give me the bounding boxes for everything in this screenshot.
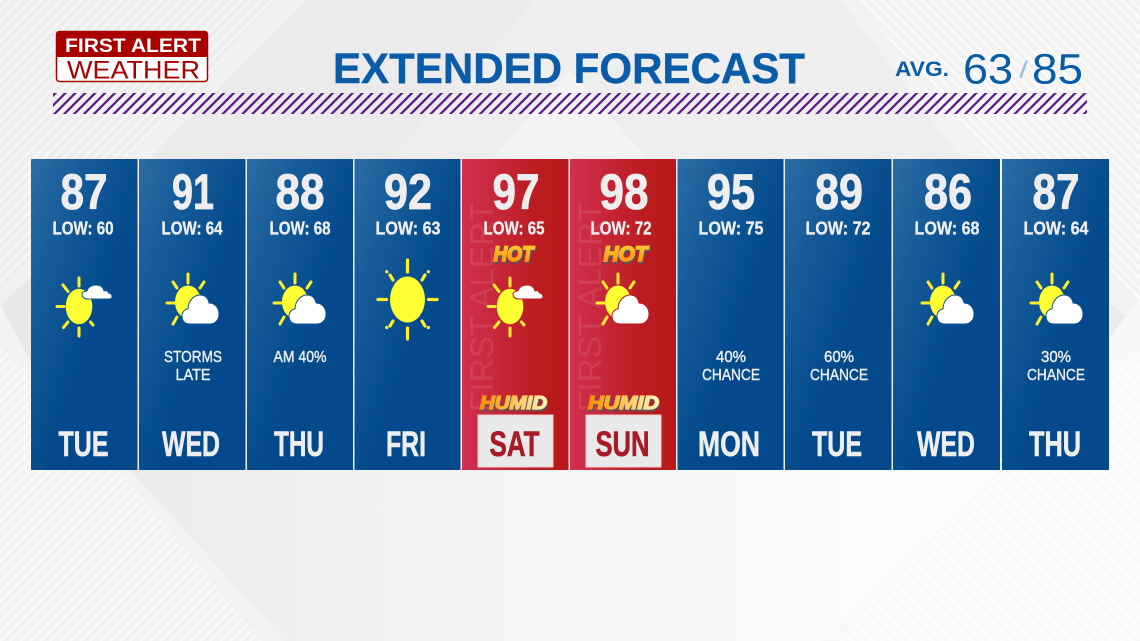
panel: next Thursday: CHANCE: [1027, 367, 1085, 384]
panel: Tuesday: 87: [60, 164, 108, 220]
panel: Monday: 40%: [716, 349, 746, 366]
icon: mostly sunny: [57, 278, 112, 336]
panel: Saturday (alert): [462, 159, 568, 470]
panel: next Thursday: LOW: 64: [1024, 218, 1089, 238]
panel: Saturday (alert): LOW: 65: [484, 218, 544, 238]
watermark: FIRST ALERT: [572, 202, 608, 412]
panel: next Thursday: [1002, 159, 1109, 470]
panel: Friday: 92: [384, 164, 432, 220]
badge: hot: HOT: [494, 242, 535, 266]
panel: Monday: [678, 159, 784, 470]
panel: Wednesday: [139, 159, 246, 470]
panel: next Tuesday: TUE: [812, 425, 862, 464]
panel: Wednesday: STORMS: [164, 349, 222, 366]
panel: next Thursday: 30%: [1041, 349, 1071, 366]
panel: next Thursday: 87: [1032, 164, 1080, 220]
panel: Sunday (alert): [570, 159, 676, 470]
average temperatures: 63: [963, 46, 1013, 94]
panel: Tuesday: TUE: [58, 425, 108, 464]
day label box: SAT: [490, 425, 540, 464]
panel: Monday: CHANCE: [702, 367, 760, 384]
panel: next Tuesday: 60%: [824, 349, 854, 366]
panel: Thursday: 88: [276, 164, 324, 220]
panel: Friday: LOW: 63: [376, 218, 440, 238]
watermark: FIRST ALERT: [464, 202, 500, 412]
panel: Saturday (alert): 97: [492, 164, 540, 220]
panel: Tuesday: [31, 159, 138, 470]
panel: next Wednesday: [893, 159, 1000, 470]
icon: partly cloudy: [274, 274, 326, 324]
panel: Friday: FRI: [386, 425, 426, 464]
panel: Monday: MON: [698, 425, 760, 464]
panel: Sunday (alert): 98: [600, 164, 648, 220]
panel: next Thursday: THU: [1029, 425, 1081, 464]
panel: next Tuesday: 89: [815, 164, 863, 220]
panel: Wednesday: LOW: 64: [162, 218, 223, 238]
icon: sunny: [378, 260, 437, 339]
panel: Sunday (alert): LOW: 72: [590, 218, 652, 238]
title: EXTENDED FORECAST: [333, 45, 805, 93]
panel: next Wednesday: 86: [924, 164, 972, 220]
panel: Friday: [354, 159, 460, 470]
panel: Thursday: THU: [274, 425, 324, 464]
logo: First Alert Weather: [56, 31, 208, 84]
icon: partly cloudy: [597, 274, 649, 324]
panel: next Tuesday: [785, 159, 892, 470]
panel: Monday: 95: [707, 164, 755, 220]
panel: Wednesday: LATE: [176, 367, 210, 384]
average temperatures: 85: [1032, 46, 1083, 94]
day label box: [478, 415, 553, 467]
icon: mostly sunny: [488, 278, 543, 336]
panel: Wednesday: 91: [172, 164, 214, 220]
purple hatched divider: [53, 93, 1087, 114]
panel: next Tuesday: LOW: 72: [806, 218, 870, 238]
panel: Thursday: [247, 159, 353, 470]
average temperatures: AVG.: [895, 58, 949, 81]
average temperatures: [895, 46, 1083, 94]
panel: Thursday: AM 40%: [274, 349, 327, 366]
panel: Monday: LOW: 75: [698, 218, 764, 238]
panel: Wednesday: WED: [162, 425, 220, 464]
badge: humid: HUMID: [588, 393, 659, 413]
average temperatures: /: [1019, 57, 1028, 84]
panel: Tuesday: LOW: 60: [52, 218, 114, 238]
badge: humid: HUMID: [480, 393, 547, 413]
logo: First Alert Weather: WEATHER: [67, 56, 200, 84]
icon: partly cloudy: [167, 274, 219, 324]
day label box: [586, 415, 661, 467]
icon: partly cloudy: [922, 274, 974, 324]
badge: hot: HOT: [604, 242, 649, 266]
panel: next Tuesday: CHANCE: [810, 367, 868, 384]
panel: Thursday: LOW: 68: [270, 218, 330, 238]
logo: First Alert Weather: FIRST ALERT: [65, 35, 201, 57]
icon: partly cloudy: [1031, 274, 1083, 324]
day label box: SUN: [596, 425, 650, 464]
panel: next Wednesday: LOW: 68: [914, 218, 980, 238]
panel: next Wednesday: WED: [917, 425, 975, 464]
